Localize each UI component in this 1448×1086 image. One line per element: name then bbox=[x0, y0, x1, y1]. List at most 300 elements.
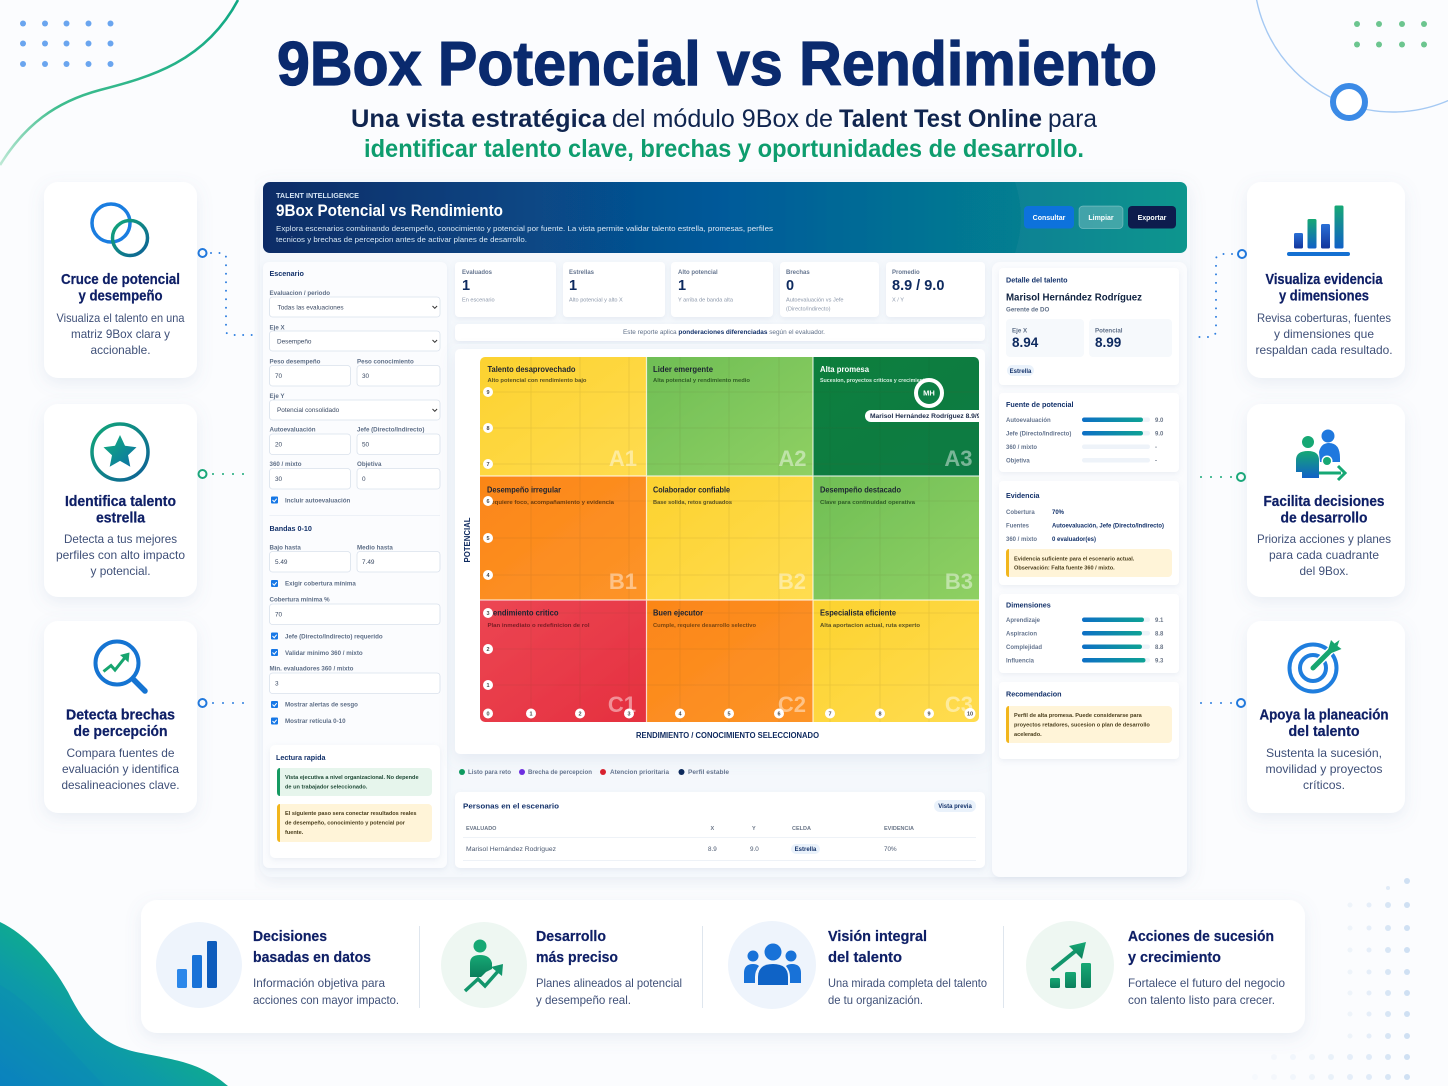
icon: bars bbox=[177, 941, 217, 988]
cell C3: Especialista eficiente bbox=[820, 609, 897, 618]
card text bbox=[1266, 746, 1382, 792]
y axis ticks: 2 bbox=[486, 647, 490, 653]
benefit: Acciones de sucesión: con talento listo para crecer. bbox=[1128, 993, 1275, 1007]
y axis ticks: 7 bbox=[486, 462, 490, 468]
card: Fuente de potencial: - bbox=[1155, 445, 1157, 451]
metric: Potencial: 8.99 bbox=[1095, 335, 1121, 350]
icon: group of people bbox=[744, 944, 801, 985]
button: Consultar: Consultar bbox=[1033, 215, 1066, 222]
pill: Vista previa bbox=[934, 800, 976, 812]
cell A2: Lider emergente bbox=[653, 365, 714, 374]
cell A2: A2 bbox=[778, 446, 806, 471]
cell A2 bbox=[653, 365, 806, 471]
card text bbox=[56, 532, 185, 578]
kpi: Promedio: Promedio bbox=[892, 270, 920, 276]
card heading: Cruce de potencial bbox=[61, 272, 180, 288]
badge: Estrella: Estrella bbox=[1010, 369, 1032, 375]
card text: respaldan cada resultado. bbox=[1256, 343, 1392, 357]
field: min evaluadores: Min. evaluadores 360 / mixto bbox=[270, 666, 354, 672]
card text bbox=[1256, 311, 1392, 357]
notice bar: Este reporte aplica ponderaciones diferenciadas según el evaluador. bbox=[623, 330, 825, 336]
decoration: top-right arc and ring bbox=[1254, 0, 1448, 118]
fields: fuentes: 20 bbox=[275, 442, 283, 448]
benefit: Visión integral del talento: del talento bbox=[828, 949, 902, 966]
cell B3: Clave para continuidad operativa bbox=[820, 500, 916, 506]
card heading: Facilita decisiones bbox=[1264, 494, 1384, 510]
kpi: Alto potencial: Alto potencial bbox=[678, 270, 718, 276]
table header: EVIDENCIA bbox=[884, 826, 914, 832]
x axis label: RENDIMIENTO / CONOCIMIENTO SELECCIONADO bbox=[636, 731, 819, 740]
button: Exportar: Exportar bbox=[1138, 215, 1167, 222]
note: yellow bbox=[277, 804, 432, 842]
kpi: Brechas: (Directo/Indirecto) bbox=[786, 306, 831, 312]
x axis ticks: 2 bbox=[578, 712, 582, 718]
field: Eje X: Desempeño bbox=[277, 338, 312, 346]
benefit: Decisiones basadas en datos: basadas en datos bbox=[253, 949, 371, 966]
y axis ticks: 8 bbox=[486, 426, 490, 432]
card: Evidencia: Fuentes bbox=[1006, 524, 1030, 530]
kpi: Promedio: X / Y bbox=[892, 298, 904, 304]
card text: Prioriza acciones y planes bbox=[1257, 532, 1391, 546]
benefit: Acciones de sucesión bbox=[1026, 921, 1285, 1009]
note: recommendation bbox=[1006, 706, 1172, 743]
pill: Vista previa: Vista previa bbox=[938, 804, 972, 810]
decoration: bottom-right dots bbox=[1252, 878, 1410, 1080]
benefit: Visión integral del talento: Una mirada completa del talento bbox=[828, 976, 987, 990]
field: Eje X bbox=[270, 324, 440, 351]
cell B3: Desempeño destacado bbox=[820, 486, 901, 494]
card: Detalle del talento: Gerente de DO bbox=[1006, 306, 1050, 314]
fields: pesos: 30 bbox=[362, 373, 370, 380]
table row: Estrella bbox=[795, 847, 817, 853]
panel: 9-box matrix bbox=[455, 349, 990, 754]
card text: críticos. bbox=[1303, 778, 1345, 792]
benefit: Desarrollo más preciso: más preciso bbox=[536, 949, 618, 966]
cell B2: Colaborador confiable bbox=[653, 486, 730, 494]
card text: Sustenta la sucesión, bbox=[1266, 746, 1382, 760]
kpi: Brechas: Autoevaluación vs Jefe bbox=[786, 298, 844, 304]
icon: target with dart bbox=[1290, 640, 1342, 692]
card: Dimensiones: 9.1 bbox=[1155, 618, 1164, 624]
legend: Atencion prioritaria bbox=[610, 770, 670, 776]
note: recommendation: acelerado. bbox=[1014, 732, 1042, 738]
card: Fuente de potencial: 360 / mixto bbox=[1006, 445, 1037, 451]
panel: people table bbox=[455, 792, 985, 868]
card heading bbox=[65, 494, 176, 526]
card text: y dimensiones que bbox=[1274, 327, 1374, 341]
note: green bbox=[277, 768, 432, 796]
kpi: Estrellas: Alto potencial y alto X bbox=[569, 298, 623, 304]
fields: pesos: 70 bbox=[275, 373, 283, 380]
card heading bbox=[1260, 708, 1388, 740]
field: Eje X: Eje X bbox=[270, 324, 286, 332]
kpi: Alto potencial: Y arriba de banda alta bbox=[678, 298, 734, 304]
cell C2: Buen ejecutor bbox=[653, 609, 703, 618]
fields: bandas: 5.49 bbox=[275, 559, 288, 566]
panel: Visualiza evidencia bbox=[1247, 182, 1405, 378]
card: Dimensiones bbox=[999, 594, 1179, 673]
metric: Eje X: Eje X bbox=[1012, 328, 1028, 334]
icon: growth bars and arrow bbox=[1050, 942, 1091, 988]
field: cobertura: 70 bbox=[275, 612, 283, 618]
x axis ticks: 0 bbox=[486, 712, 490, 718]
x axis ticks bbox=[483, 708, 976, 719]
decoration: top-left dot grid bbox=[20, 20, 114, 67]
panel: Cruce de potencial bbox=[44, 182, 197, 378]
field: Eje Y bbox=[270, 393, 440, 420]
fields: fuentes: Objetiva bbox=[357, 461, 382, 468]
card: Dimensiones: 8.8 bbox=[1155, 632, 1164, 638]
note: yellow: de desempeño, conocimiento y potencial por bbox=[285, 820, 406, 826]
table header: Y bbox=[752, 826, 756, 832]
table row bbox=[466, 844, 897, 854]
talent marker MH: MH bbox=[923, 388, 935, 398]
fields: fuentes: Autoevaluación bbox=[270, 426, 316, 434]
table header: X bbox=[710, 826, 714, 832]
fields: pesos bbox=[270, 358, 440, 386]
talent label pill bbox=[865, 410, 990, 422]
cell A2: Alta potencial y rendimiento medio bbox=[653, 378, 750, 384]
cell B1 bbox=[487, 486, 637, 594]
card heading: de desarrollo bbox=[1280, 510, 1368, 526]
legend bbox=[459, 769, 730, 776]
title: 9Box Potencial vs Rendimiento bbox=[277, 30, 1157, 99]
cell C2 bbox=[653, 609, 806, 717]
connector: right 1 bbox=[1192, 250, 1246, 337]
subtitle line 1: de bbox=[805, 105, 833, 133]
icon: overlapping circles bbox=[92, 204, 148, 256]
card text bbox=[62, 746, 180, 792]
card: Dimensiones: Aprendizaje bbox=[1006, 618, 1041, 624]
card: Dimensiones: Influencia bbox=[1006, 658, 1035, 664]
subtitle line 1: Una vista estratégica bbox=[351, 105, 607, 133]
fields: fuentes bbox=[270, 426, 440, 489]
x axis ticks: 6 bbox=[777, 712, 781, 718]
connector: left 2 bbox=[198, 470, 246, 478]
card heading: de percepción bbox=[74, 724, 168, 740]
panel: scenario sidebar: Escenario bbox=[270, 269, 304, 278]
kpi: Evaluados: En escenario bbox=[462, 298, 495, 304]
note: evidence: Observación: Falta fuente 360 / mixto. bbox=[1014, 566, 1115, 572]
cell B2: Base solida, retos graduados bbox=[653, 500, 733, 506]
metric: Potencial: Potencial bbox=[1095, 328, 1123, 334]
x axis ticks: 10 bbox=[967, 712, 973, 718]
card: Fuente de potencial: - bbox=[1155, 458, 1157, 464]
y axis ticks bbox=[483, 387, 493, 690]
badge: Estrella bbox=[1007, 365, 1034, 376]
field: Eje Y: Eje Y bbox=[270, 393, 285, 400]
benefit: Desarrollo más preciso bbox=[441, 922, 682, 1008]
kpi: Evaluados: 1 bbox=[462, 278, 470, 294]
kpi: Estrellas bbox=[563, 262, 665, 317]
benefit: Desarrollo más preciso: Desarrollo bbox=[536, 928, 606, 945]
fields: bandas: Bajo hasta bbox=[270, 544, 301, 552]
table row: 70% bbox=[884, 846, 897, 853]
kpi: Alto potencial bbox=[671, 262, 773, 317]
kpi: Evaluados bbox=[455, 262, 556, 317]
fields: fuentes: Jefe (Directo/Indirecto) bbox=[357, 426, 424, 434]
card text: accionable. bbox=[90, 343, 150, 357]
card: Fuente de potencial: Jefe (Directo/Indirecto) bbox=[1006, 432, 1071, 438]
card text: del 9Box. bbox=[1300, 564, 1348, 578]
fields: bandas: 7.49 bbox=[362, 559, 375, 566]
dashboard header banner: Explora escenarios combinando desempeño, conocimiento y potencial por fuente. La vista permite validar talento estrella, promesas, perfiles bbox=[276, 224, 773, 233]
field: cobertura: Cobertura mínima % bbox=[270, 596, 330, 604]
fields: fuentes: 0 bbox=[362, 476, 366, 483]
kpi: Promedio bbox=[886, 262, 985, 317]
field: Evaluacion bbox=[270, 290, 440, 317]
benefit: Decisiones basadas en datos: acciones con mayor impacto. bbox=[253, 993, 399, 1007]
checkbox: Jefe requerido: Jefe (Directo/Indirecto) requerido bbox=[285, 634, 383, 640]
button: Limpiar: Limpiar bbox=[1088, 215, 1114, 222]
benefit: Desarrollo más preciso: y desempeño real. bbox=[536, 993, 631, 1007]
y axis ticks: 6 bbox=[486, 499, 490, 505]
dashboard header banner: TALENT INTELLIGENCE bbox=[276, 191, 359, 200]
card: Fuente de potencial: Autoevaluación bbox=[1006, 418, 1051, 424]
card text: Revisa coberturas, fuentes bbox=[1257, 311, 1391, 325]
note: yellow: fuente. bbox=[285, 830, 304, 836]
cell A3: A3 bbox=[944, 446, 972, 471]
card heading bbox=[61, 272, 180, 304]
card text: matriz 9Box clara y bbox=[71, 327, 170, 341]
card heading bbox=[1264, 494, 1384, 526]
matrix cells bbox=[480, 357, 979, 722]
y axis ticks: 4 bbox=[486, 573, 490, 579]
panel: scenario sidebar bbox=[263, 262, 447, 868]
card text: movilidad y proyectos bbox=[1266, 762, 1382, 776]
note: evidence bbox=[1006, 549, 1172, 577]
card heading bbox=[66, 708, 175, 740]
metric: Eje X bbox=[1006, 319, 1084, 357]
card: Evidencia: Cobertura bbox=[1006, 510, 1035, 516]
dashboard header banner: 9Box Potencial vs Rendimiento bbox=[276, 202, 503, 220]
metric: Eje X: 8.94 bbox=[1012, 335, 1039, 350]
card: Evidencia: 70% bbox=[1052, 510, 1065, 516]
fields: bandas: Medio hasta bbox=[357, 544, 393, 552]
card text: perfiles con alto impacto bbox=[56, 548, 185, 562]
card: Detalle del talento bbox=[999, 268, 1179, 385]
notice bar bbox=[455, 324, 985, 341]
cell C1: Plan inmediato o redefinicion de rol bbox=[488, 623, 590, 629]
fields: pesos: Peso desempeño bbox=[270, 358, 321, 366]
card: Recomendacion bbox=[999, 682, 1179, 759]
subtitle line 1 bbox=[351, 105, 1097, 133]
icon: magnifier with trend bbox=[96, 642, 145, 691]
panel: Facilita decisiones bbox=[1247, 404, 1405, 597]
card heading: Apoya la planeación bbox=[1260, 708, 1388, 724]
kpi: Estrellas: 1 bbox=[569, 278, 577, 294]
panel: talent details column bbox=[992, 262, 1187, 877]
subtitle line 1: para bbox=[1048, 105, 1097, 133]
card: Dimensiones: 9.3 bbox=[1155, 658, 1164, 664]
y axis ticks: 3 bbox=[486, 611, 490, 617]
cell A1: Talento desaprovechado bbox=[488, 365, 576, 374]
y axis label: POTENCIAL bbox=[463, 517, 472, 562]
checkbox: Exigir cobertura: Exigir cobertura mínima bbox=[285, 580, 356, 588]
note: recommendation: Perfil de alta promesa. Puede considerarse para bbox=[1014, 713, 1143, 719]
cell A1: A1 bbox=[609, 446, 637, 471]
card heading: y dimensiones bbox=[1279, 288, 1369, 304]
note: green: de un trabajador seleccionado. bbox=[285, 784, 368, 790]
table row: 9.0 bbox=[750, 846, 759, 853]
button: Exportar bbox=[1128, 206, 1176, 228]
checkbox: reticula: Mostrar retícula 0-10 bbox=[285, 718, 346, 725]
metric: Potencial bbox=[1089, 319, 1172, 357]
fields: fuentes: 30 bbox=[275, 476, 283, 483]
cell B1: B1 bbox=[609, 569, 637, 594]
checkbox: alertas: Mostrar alertas de sesgo bbox=[285, 702, 358, 708]
benefit: Desarrollo más preciso: Planes alineados al potencial bbox=[536, 976, 682, 990]
card: Dimensiones: 8.8 bbox=[1155, 645, 1164, 651]
dashboard header banner bbox=[263, 182, 1187, 253]
checkbox: Validar minimo: Validar mínimo 360 / mixto bbox=[285, 650, 363, 657]
cell B2 bbox=[653, 486, 806, 594]
panel: people table: Personas en el escenario bbox=[463, 802, 560, 810]
card text bbox=[1257, 532, 1391, 578]
cell C1: Rendimiento critico bbox=[488, 609, 559, 618]
button: Consultar bbox=[1024, 206, 1074, 228]
card heading: del talento bbox=[1288, 724, 1360, 740]
panel: dashboard screenshot bbox=[260, 180, 1190, 877]
icon: bar chart bbox=[1287, 206, 1350, 256]
decoration: top-right green dots bbox=[1354, 21, 1427, 48]
table header bbox=[466, 826, 914, 832]
panel: Identifica talento estrella bbox=[44, 404, 197, 597]
x axis ticks: 4 bbox=[678, 712, 682, 718]
panel: lectura rapida: Lectura rapida bbox=[276, 753, 327, 762]
cell A1 bbox=[488, 365, 637, 471]
x axis ticks: 1 bbox=[529, 712, 533, 718]
card heading: Detecta brechas bbox=[66, 708, 175, 724]
card heading: Visualiza evidencia bbox=[1266, 272, 1383, 288]
cell C3 bbox=[820, 609, 973, 717]
card text: desalineaciones clave. bbox=[62, 778, 180, 792]
subtitle line 1: del módulo 9Box bbox=[612, 105, 799, 133]
dashboard header banner: tecnicos y brechas de percepcion antes de activar planes de desarrollo. bbox=[276, 235, 527, 244]
field: min evaluadores bbox=[270, 666, 440, 694]
connector: right 3 bbox=[1192, 699, 1245, 707]
benefit: Decisiones basadas en datos: Información objetiva para bbox=[253, 976, 385, 990]
fields: fuentes: 50 bbox=[362, 442, 370, 448]
kpi: Alto potencial: 1 bbox=[678, 278, 686, 294]
card heading: estrella bbox=[96, 510, 146, 526]
card: Dimensiones: Complejidad bbox=[1006, 645, 1042, 651]
field: min evaluadores: 3 bbox=[275, 680, 279, 688]
icon: star in circle bbox=[92, 424, 148, 480]
cell A1: Alto potencial con rendimiento bajo bbox=[488, 378, 587, 384]
card: Detalle del talento: Detalle del talento bbox=[1006, 276, 1068, 284]
card: Dimensiones: Dimensiones bbox=[1006, 600, 1051, 610]
kpi: Brechas bbox=[780, 262, 879, 317]
subtitle line 2: identificar talento clave, brechas y oportunidades de desarrollo. bbox=[364, 135, 1084, 163]
fields: pesos: Peso conocimiento bbox=[357, 358, 414, 366]
card: Detalle del talento: Marisol Hernández Rodríguez bbox=[1006, 292, 1142, 304]
y axis ticks: 9 bbox=[486, 390, 490, 396]
card: Fuente de potencial: 9.0 bbox=[1155, 418, 1164, 424]
button: Limpiar bbox=[1079, 206, 1123, 228]
cell C1 bbox=[488, 609, 636, 717]
card: Fuente de potencial: Fuente de potencial bbox=[1006, 400, 1074, 409]
note: green: Vista ejecutiva a nivel organizacional. No depende bbox=[285, 775, 419, 781]
kpi: Brechas: Brechas bbox=[786, 270, 810, 276]
field: Eje Y: Potencial consolidado bbox=[277, 407, 340, 414]
benefit: Acciones de sucesión: Acciones de sucesión bbox=[1128, 928, 1274, 945]
legend: Perfil estable bbox=[688, 770, 730, 776]
table row: Marisol Hernández Rodríguez bbox=[466, 846, 556, 853]
card: Evidencia: Autoevaluación, Jefe (Directo/Indirecto) bbox=[1052, 524, 1164, 530]
cell A3 bbox=[820, 365, 972, 471]
legend: Listo para reto bbox=[468, 770, 511, 776]
benefit: Visión integral del talento: Visión integral bbox=[828, 928, 927, 945]
card text: evaluación y identifica bbox=[62, 762, 179, 776]
note: evidence: Evidencia suficiente para el escenario actual. bbox=[1014, 556, 1135, 562]
card text: y potencial. bbox=[90, 564, 150, 578]
panel: scenario sidebar: Bandas 0-10 bbox=[270, 524, 312, 533]
legend: Brecha de percepcion bbox=[528, 770, 592, 776]
cell C3: Alta aportacion actual, ruta experto bbox=[820, 623, 920, 629]
card: Dimensiones: Aspiracion bbox=[1006, 632, 1037, 638]
cell C1: C1 bbox=[608, 692, 636, 717]
kpi: Estrellas: Estrellas bbox=[569, 270, 595, 276]
cell B3 bbox=[820, 486, 973, 594]
fields: bandas bbox=[270, 544, 440, 572]
fields: fuentes: 360 / mixto bbox=[270, 461, 302, 468]
card: Recomendacion: Recomendacion bbox=[1006, 690, 1062, 698]
cell C3: C3 bbox=[945, 692, 973, 717]
benefit: Acciones de sucesión: Fortalece el futuro del negocio bbox=[1128, 976, 1285, 990]
decoration: top-left green curve bbox=[0, 0, 238, 165]
icon: person with growth arrow bbox=[465, 940, 503, 991]
checkbox: Incluir autoevaluación: Incluir autoevaluación bbox=[285, 498, 351, 504]
cell A3: Sucesion, proyectos criticos y crecimiento bbox=[820, 378, 928, 384]
icon: people with arrow bbox=[1296, 430, 1345, 480]
card heading: Identifica talento bbox=[65, 494, 176, 510]
card text: para cada cuadrante bbox=[1269, 548, 1379, 562]
card: Fuente de potencial bbox=[999, 393, 1179, 472]
field: cobertura bbox=[270, 596, 440, 624]
cell C2: Cumple, requiere desarrollo selectivo bbox=[653, 623, 756, 629]
card: Evidencia: 0 evaluador(es) bbox=[1052, 537, 1096, 543]
y axis ticks: 5 bbox=[486, 536, 490, 542]
x axis ticks: 3 bbox=[627, 712, 631, 718]
card heading bbox=[1266, 272, 1383, 304]
card text: Detecta a tus mejores bbox=[64, 532, 177, 546]
connector: right 2 bbox=[1200, 473, 1245, 481]
panel: lectura rapida bbox=[270, 745, 440, 858]
card text: Compara fuentes de bbox=[66, 746, 175, 760]
table row: 8.9 bbox=[708, 846, 717, 853]
x axis ticks: 5 bbox=[727, 712, 731, 718]
card: Fuente de potencial: Objetiva bbox=[1006, 458, 1030, 464]
cell B3: B3 bbox=[945, 569, 973, 594]
cell C2: C2 bbox=[778, 692, 806, 717]
card heading: y desempeño bbox=[78, 288, 163, 304]
x axis ticks: 7 bbox=[828, 712, 832, 718]
field: Evaluacion: Todas las evaluaciones bbox=[278, 304, 344, 312]
card: Evidencia: 360 / mixto bbox=[1006, 537, 1037, 543]
note: recommendation: proyectos retadores, sucesion o plan de desarrollo bbox=[1014, 722, 1150, 728]
kpi: Evaluados: Evaluados bbox=[462, 270, 493, 276]
x axis ticks: 9 bbox=[927, 712, 931, 718]
card text: Visualiza el talento en una bbox=[56, 311, 185, 325]
card: Fuente de potencial: 9.0 bbox=[1155, 432, 1164, 438]
connector: left 1 bbox=[198, 249, 252, 335]
connector: left 3 bbox=[198, 699, 252, 707]
benefit: Acciones de sucesión: y crecimiento bbox=[1128, 949, 1221, 966]
benefit: Visión integral del talento bbox=[728, 921, 987, 1009]
kpi: Brechas: 0 bbox=[786, 278, 794, 294]
card text bbox=[56, 311, 185, 357]
